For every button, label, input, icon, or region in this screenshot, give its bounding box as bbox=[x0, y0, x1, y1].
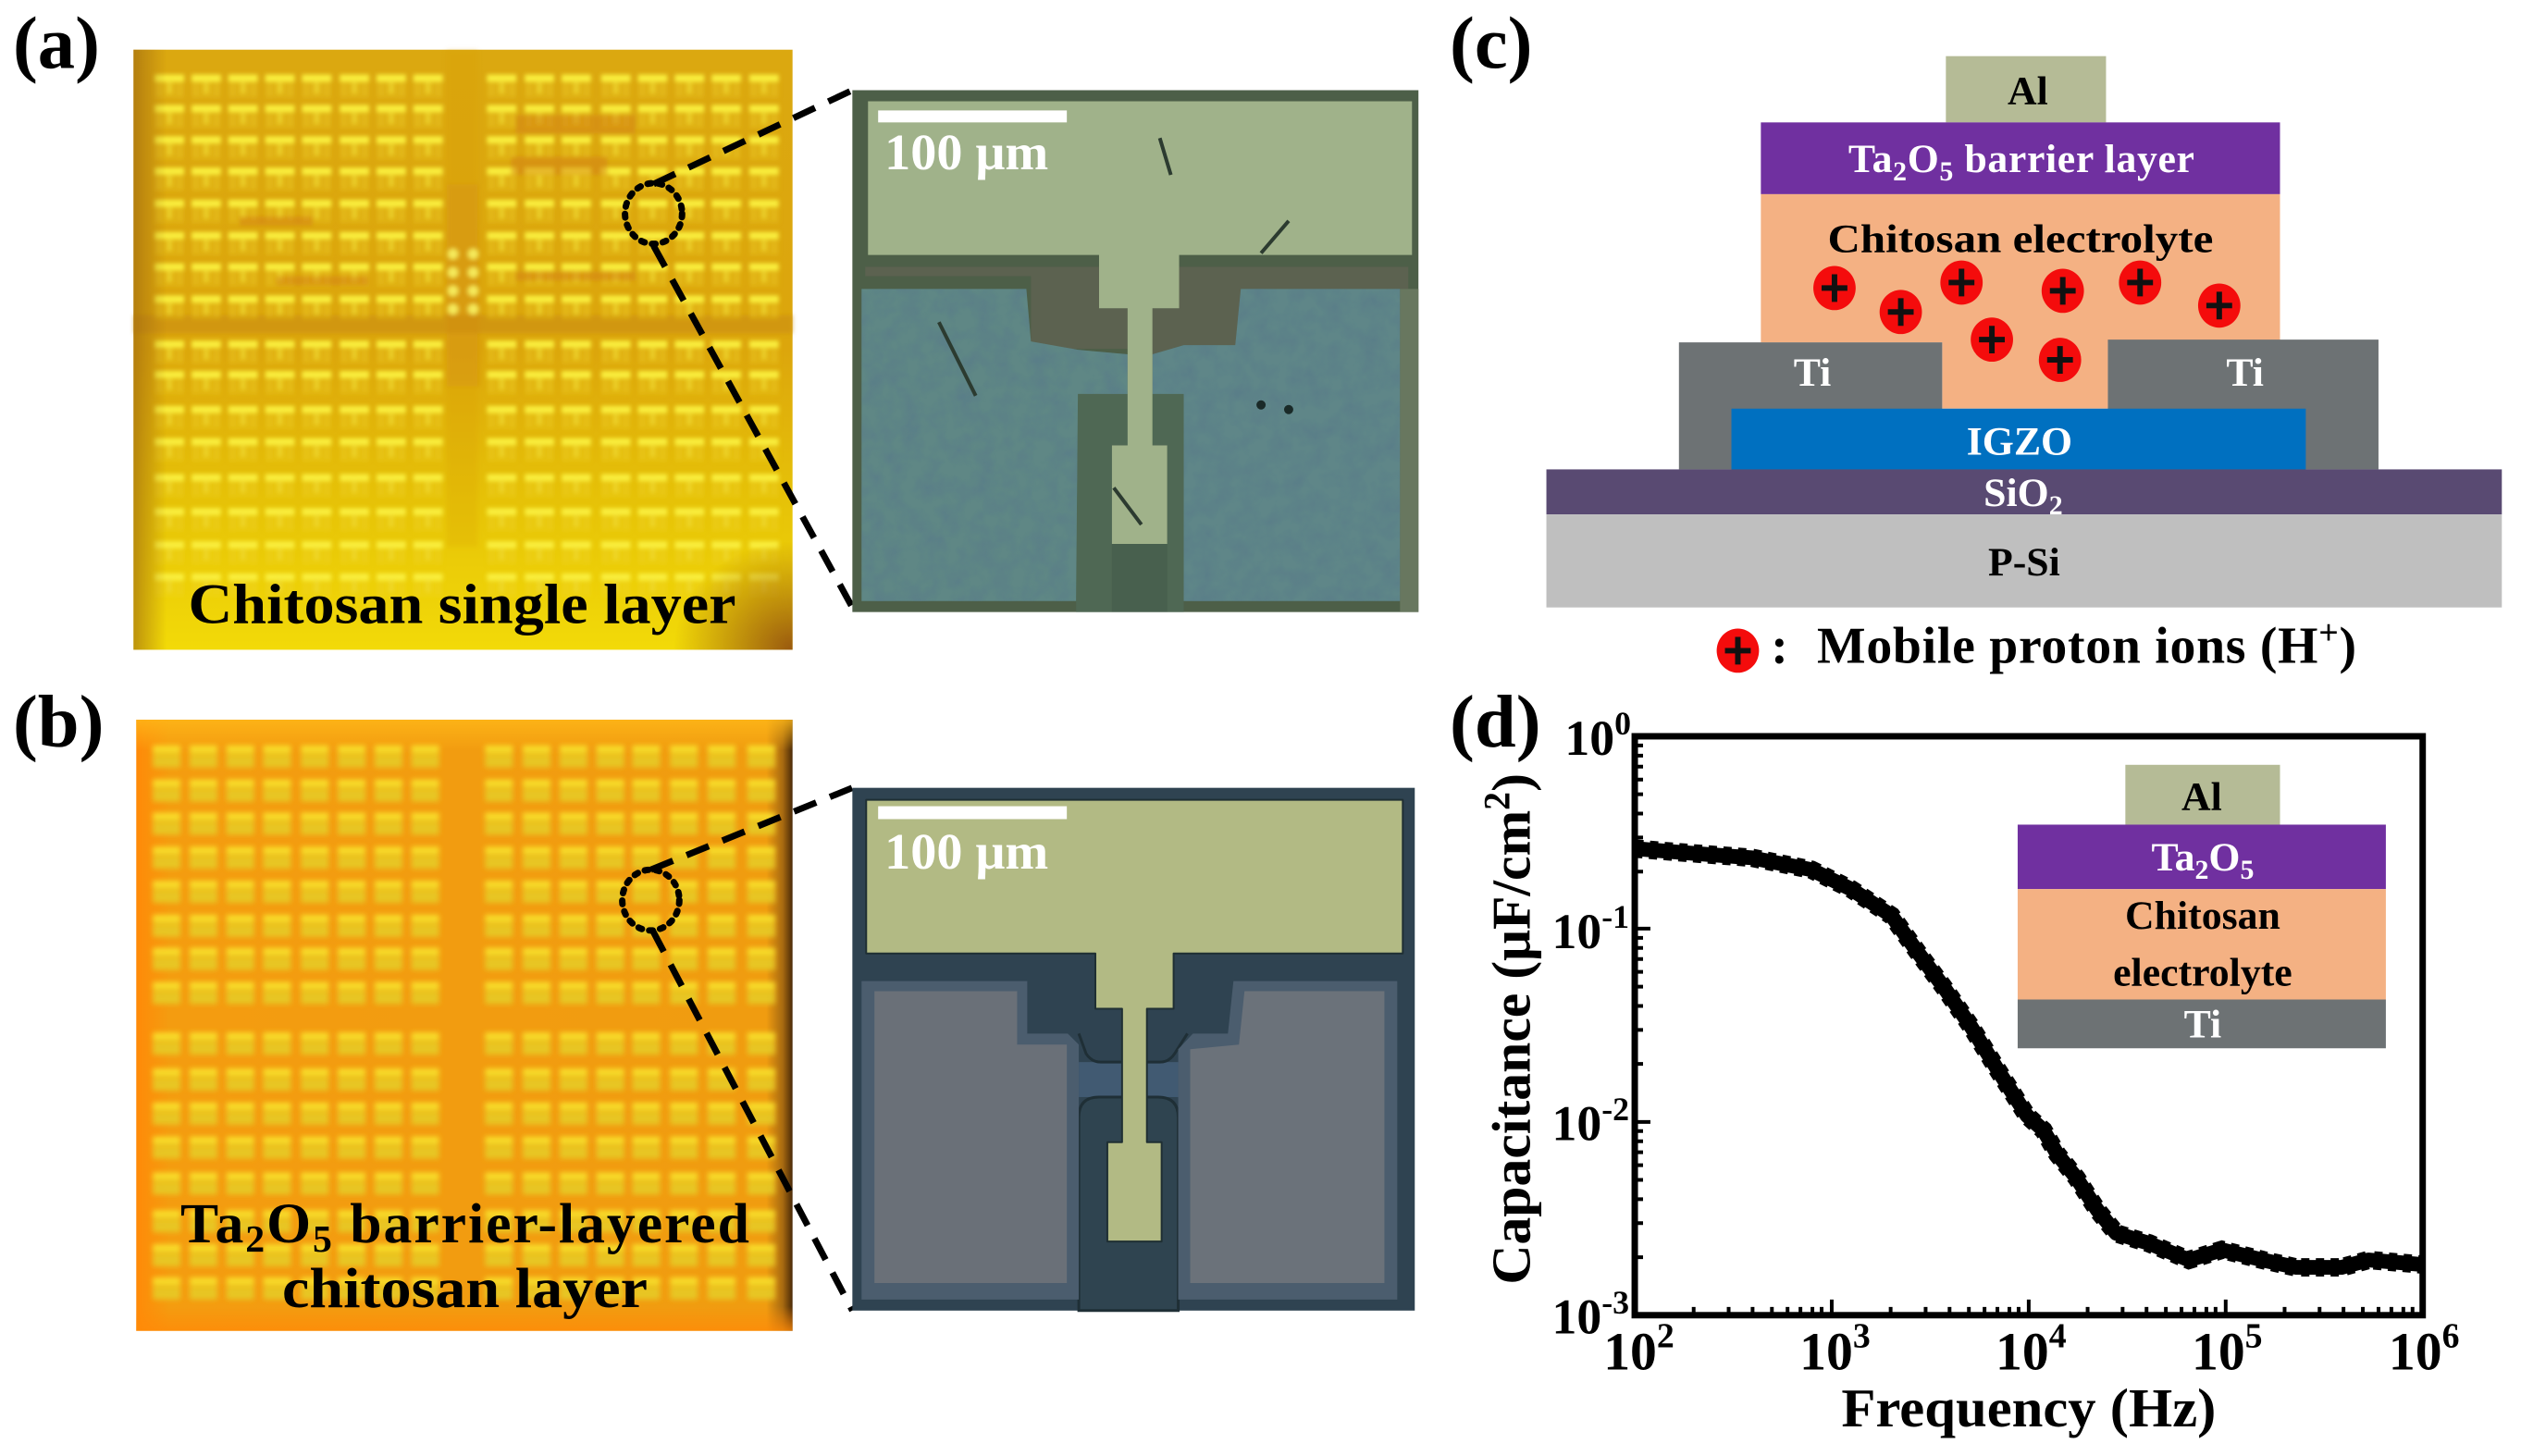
layer: IGZO bbox=[1732, 409, 2305, 472]
photo: barrier-layered array bbox=[136, 720, 793, 1331]
scale bar bbox=[878, 807, 1067, 819]
layer labels: Ti bbox=[1794, 351, 1831, 395]
layer: chitosan electrolyte bbox=[1761, 194, 2280, 409]
panel b: Ta2O5 barrier-layered chitosan bbox=[13, 681, 1415, 1331]
layer labels: IGZO bbox=[1967, 420, 2072, 464]
y axis title: ) bbox=[1481, 773, 1542, 792]
y axis title: 2 bbox=[1477, 792, 1518, 810]
x axis title: Frequency (Hz) bbox=[1841, 1377, 2216, 1438]
layer: Al bbox=[1946, 56, 2106, 122]
layer: Ta2O5 bbox=[2018, 824, 2386, 889]
photo caption: 5 bbox=[313, 1218, 332, 1261]
inset labels bbox=[2113, 775, 2292, 1046]
y axis title: Capacitance (μF/cm bbox=[1481, 810, 1542, 1285]
axes frame bbox=[1635, 736, 2423, 1315]
label (a): (a) bbox=[13, 3, 100, 85]
legend: mobile proton ions: Mobile proton ions (H bbox=[1817, 617, 2318, 674]
layer labels: Ta bbox=[1848, 137, 1893, 181]
inset micrograph b bbox=[852, 788, 1415, 1311]
label (b): (b) bbox=[13, 681, 104, 763]
layer labels: 5 bbox=[1939, 156, 1953, 187]
y tick labels: 0 bbox=[1614, 705, 1631, 742]
photo caption: Ta bbox=[180, 1192, 243, 1255]
scale bar bbox=[878, 110, 1067, 122]
dotted circle marker bbox=[623, 870, 679, 931]
photo: chitosan single layer array bbox=[133, 50, 793, 649]
layer: P-Si bbox=[1547, 514, 2502, 608]
zoom lines to inset bbox=[653, 91, 852, 608]
layer labels: 2 bbox=[2049, 490, 2063, 521]
layer: chitosan bbox=[2018, 889, 2386, 1000]
y tick labels: -1 bbox=[1601, 898, 1629, 935]
x tick labels: 4 bbox=[2049, 1317, 2067, 1356]
scale label: 100 μm bbox=[884, 124, 1048, 180]
inset labels: Chitosan bbox=[2125, 894, 2280, 938]
layer labels: Chitosan electrolyte bbox=[1827, 217, 2213, 262]
x tick labels: 5 bbox=[2245, 1317, 2263, 1356]
layer labels: SiO bbox=[1983, 471, 2049, 515]
x tick labels: 10 bbox=[2389, 1323, 2442, 1381]
x tick labels bbox=[1603, 1317, 2459, 1381]
layer: Ti left bbox=[1679, 342, 1942, 469]
layer labels: 2 bbox=[1893, 156, 1907, 187]
dotted circle marker bbox=[625, 183, 682, 244]
x tick labels: 10 bbox=[1996, 1323, 2049, 1381]
photo caption: 2 bbox=[245, 1218, 265, 1261]
layer labels: O bbox=[1908, 137, 1939, 181]
panel d: capacitance chart bbox=[1450, 681, 2459, 1438]
layer labels: barrier layer bbox=[1954, 137, 2194, 181]
inset labels: Al bbox=[2181, 775, 2222, 820]
x tick labels: 2 bbox=[1657, 1317, 1674, 1356]
label (c): (c) bbox=[1450, 3, 1532, 85]
inset micrograph a bbox=[852, 91, 1418, 612]
photo caption line 2: chitosan layer bbox=[282, 1257, 648, 1320]
y tick labels: 10 bbox=[1564, 710, 1614, 766]
y tick labels: 10 bbox=[1551, 1096, 1601, 1152]
zoom lines to inset bbox=[650, 788, 852, 1311]
layer labels: Ti bbox=[2226, 351, 2264, 395]
inset labels: Ti bbox=[2184, 1002, 2221, 1046]
photo caption: barrier-layered bbox=[334, 1192, 749, 1255]
photo caption: Chitosan single layer bbox=[188, 574, 735, 636]
layer: Ti right bbox=[2107, 339, 2379, 469]
inset labels: Ta bbox=[2151, 835, 2195, 880]
inset labels: electrolyte bbox=[2113, 951, 2292, 995]
y tick labels: 10 bbox=[1551, 1289, 1601, 1345]
layer labels: P-Si bbox=[1988, 540, 2060, 585]
legend: mobile proton ions: + bbox=[2318, 613, 2339, 652]
legend: mobile proton ions: : bbox=[1771, 617, 1788, 674]
legend: mobile proton ions: ) bbox=[2340, 617, 2356, 674]
layer: SiO2 bbox=[1547, 469, 2502, 514]
scale label: 100 μm bbox=[884, 823, 1048, 880]
inset labels: 2 bbox=[2195, 855, 2208, 885]
layer: Al bbox=[2125, 765, 2280, 824]
inset labels: O bbox=[2208, 835, 2240, 880]
photo caption: O bbox=[266, 1192, 311, 1255]
panel a: chitosan single layer bbox=[13, 3, 1418, 649]
layer: Ti bbox=[2018, 1000, 2386, 1048]
y tick labels: -2 bbox=[1601, 1091, 1629, 1128]
capacitance curve bbox=[1635, 848, 2423, 1267]
label (d): (d) bbox=[1450, 681, 1541, 763]
y tick labels bbox=[1551, 705, 1631, 1345]
x tick labels: 10 bbox=[1603, 1323, 1657, 1381]
layer labels bbox=[1794, 68, 2264, 585]
x tick labels: 6 bbox=[2442, 1317, 2459, 1356]
x tick labels: 10 bbox=[1799, 1323, 1853, 1381]
layer: Ta2O5 bbox=[1761, 122, 2280, 194]
y tick labels: 10 bbox=[1551, 904, 1601, 959]
panel c: device cross-section bbox=[1450, 3, 2502, 674]
x tick labels: 3 bbox=[1853, 1317, 1871, 1356]
x tick labels: 10 bbox=[2192, 1323, 2245, 1381]
inset labels: 5 bbox=[2240, 855, 2254, 885]
mobile proton ions bbox=[1813, 261, 2241, 382]
inset stack bbox=[2018, 765, 2386, 1048]
y tick labels: -3 bbox=[1601, 1284, 1629, 1321]
axis ticks bbox=[1635, 736, 2423, 1315]
layer labels: Al bbox=[2008, 68, 2048, 113]
